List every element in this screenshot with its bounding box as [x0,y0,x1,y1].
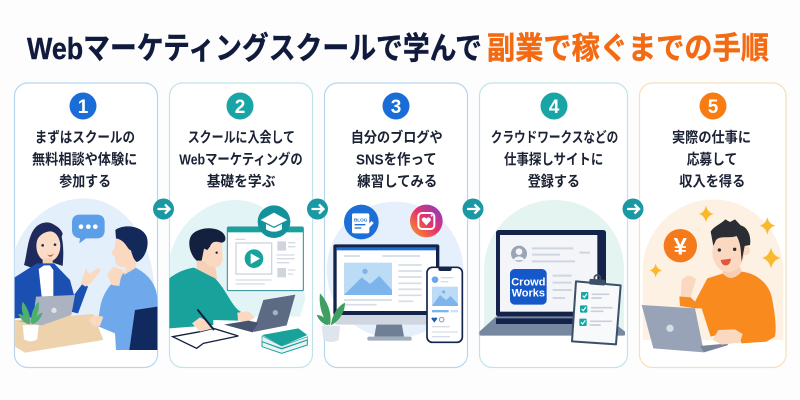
icon: blog [344,205,379,239]
man with raised fist [642,219,776,352]
illustration: laptop with CrowdWorks and checklist [479,200,625,344]
step 3 text: 自分のブログや [351,128,443,146]
arrow 2 to 3 [307,198,328,220]
step 2 text: 基礎を学ぶ [207,172,276,190]
step 1 number badge [70,92,96,120]
step 5 text [672,128,751,190]
step 4 text: 登録する [528,174,580,190]
step 3 number badge [382,92,410,120]
arrow 4 to 5 [622,198,644,220]
step 4 text [491,130,618,190]
step 3 text: 練習してみる [357,174,437,190]
step 5 text: 応募して [687,152,737,168]
icon: instagram style [410,205,443,237]
clipboard checklist [572,275,621,344]
step 1 text [32,130,137,190]
icon: yen coin: ¥ [674,234,688,261]
panel: step 1 [14,83,158,368]
desktop monitor [333,244,439,341]
sparkles [649,205,781,278]
illustration: studying online with laptop [169,200,307,353]
step 1 number badge: 1 [78,97,89,118]
title: Webマーケティングスクールで学んで [27,31,482,66]
CrowdWorks logo [510,269,547,305]
step 5 text: 実際の仕事に [672,128,751,146]
step 4 text: 仕事探しサイトに [504,150,603,168]
step 5 text: 収入を得る [679,174,745,190]
CrowdWorks logo: Crowd [511,276,545,288]
icon: blog: BLOG [354,217,368,222]
illustration: blog and SNS on desktop and phone [317,202,463,342]
arrow 3 to 4 [462,198,484,220]
step 2 text: Webマーケティングの [179,150,303,168]
step 5 number badge: 5 [708,97,719,118]
step 5 number badge [700,92,726,120]
step 1 text: 参加する [59,174,111,190]
icon: yen coin [664,229,697,262]
step 1 text: 無料相談や体験に [32,150,137,168]
step 3 text: SNSを作って [356,152,437,168]
laptop [479,230,625,336]
illustration: earning income [642,199,783,352]
arrow 1 to 2 [153,198,174,220]
smartphone [427,267,462,342]
panel: step 4 [479,83,628,368]
step 2 number badge: 2 [235,97,245,118]
title: 副業で稼ぐまでの手順 [487,31,769,66]
illustration: consultation between two people [15,198,157,353]
step 4 number badge: 4 [549,97,560,118]
step 3 text [351,128,443,190]
step 3 number badge: 3 [391,97,401,118]
panel: step 2 [169,83,312,368]
panel: step 3 [317,83,468,368]
potted plant [317,293,345,342]
CrowdWorks logo: Works [512,288,545,300]
panel: step 5 [640,83,786,368]
step 4 number badge [540,92,568,120]
step 2 number badge [226,92,254,120]
step 4 text: クラウドワークスなどの [491,130,618,146]
step 1 text: まずはスクールの [35,130,135,146]
step 2 text [179,130,303,190]
step 2 text: スクールに入会して [188,130,295,146]
